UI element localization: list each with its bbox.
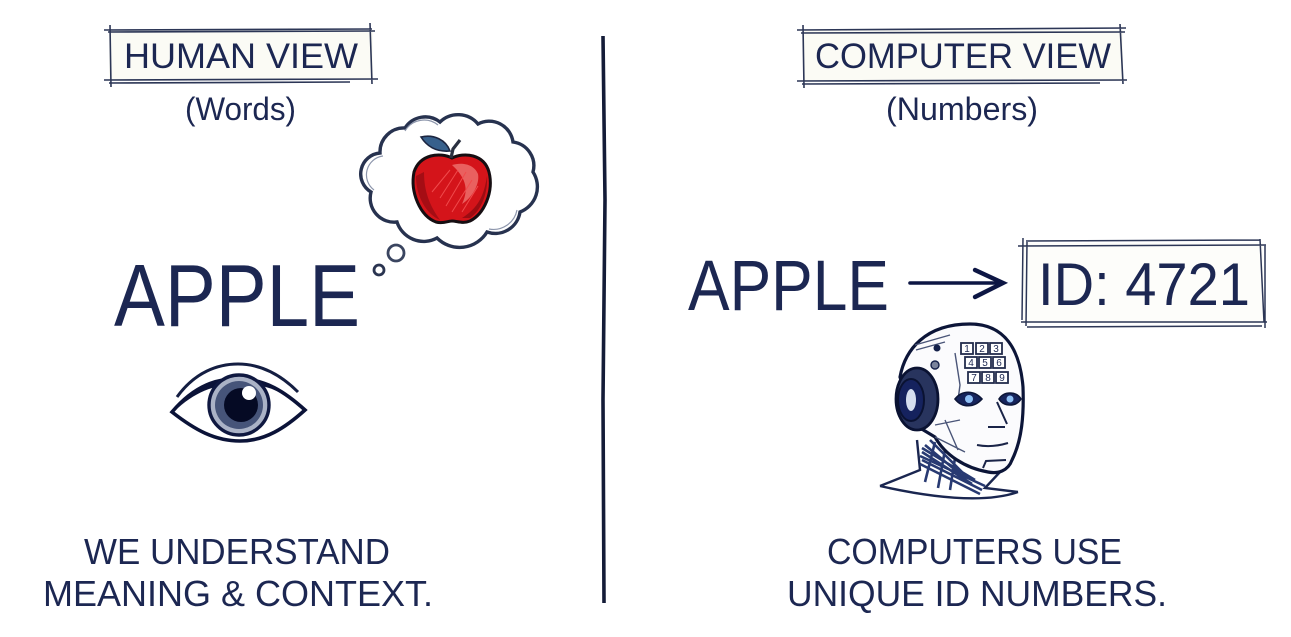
caption: computer — [787, 531, 1167, 614]
robot keypad: 2 — [979, 344, 985, 355]
robot keypad: 7 — [971, 373, 977, 384]
robot keypad: 8 — [985, 373, 991, 384]
robot keypad: 9 — [999, 373, 1005, 384]
caption: human: WE UNDERSTAND — [84, 531, 390, 572]
id box — [1018, 238, 1267, 328]
robot ear — [896, 368, 938, 430]
robot eyes — [955, 392, 1021, 406]
robot neck and shoulders — [880, 440, 1018, 498]
id box: ID: 4721 — [1038, 251, 1250, 318]
caption: human: MEANING & CONTEXT. — [43, 573, 433, 614]
thought bubble with apple — [361, 115, 537, 275]
robot keypad: 3 — [993, 344, 999, 355]
icon: eye — [172, 364, 305, 441]
robot keypad: 4 — [968, 358, 974, 369]
robot keypad — [961, 343, 1008, 384]
thought cloud — [361, 115, 537, 247]
word: apple: APPLE — [114, 246, 360, 345]
robot keypad: 6 — [996, 358, 1002, 369]
robot keypad: 5 — [982, 358, 988, 369]
heading box: computer view — [797, 24, 1127, 88]
caption: human — [43, 531, 433, 614]
word: apple: APPLE — [688, 247, 889, 326]
panel: human view — [43, 23, 537, 614]
robot nose and mouth — [977, 402, 1008, 468]
divider — [603, 36, 605, 603]
caption: computer: COMPUTERS USE — [827, 531, 1122, 572]
thought bubble dots — [388, 245, 404, 261]
robot head shell — [900, 324, 1023, 473]
arrow — [910, 270, 1003, 297]
apple — [413, 136, 490, 223]
caption: computer: UNIQUE ID NUMBERS. — [787, 573, 1167, 614]
subheading: numbers: (Numbers) — [886, 91, 1038, 127]
panel: computer view — [688, 24, 1267, 614]
subheading: words: (Words) — [185, 91, 296, 127]
heading box: computer view: COMPUTER VIEW — [815, 37, 1111, 76]
robot keypad: 1 — [964, 344, 970, 355]
icon: robot head — [880, 324, 1023, 498]
heading box: human view: HUMAN VIEW — [124, 37, 358, 76]
heading box: human view — [104, 23, 378, 87]
